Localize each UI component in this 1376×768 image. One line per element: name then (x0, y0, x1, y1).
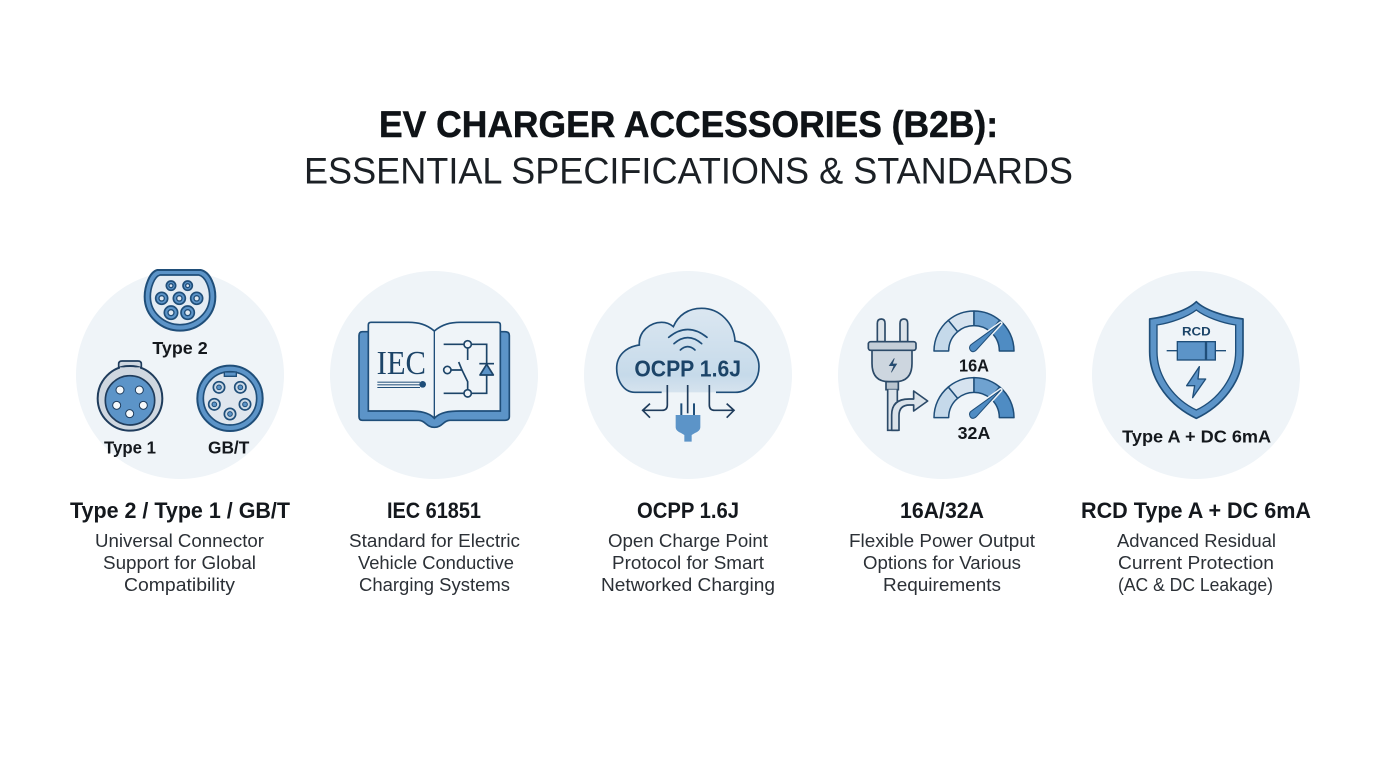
connector: Type 1 (98, 361, 162, 431)
wifi signal (669, 329, 707, 350)
label: Type A + DC 6mA: Type A + DC 6mA (1122, 427, 1271, 447)
connector: GB/T (197, 366, 263, 431)
shield label: RCD: RCD (1182, 325, 1211, 339)
heading: OCPP 1.6J: OCPP 1.6J (637, 498, 739, 523)
icon: connector types (76, 270, 284, 479)
description: 16A/32A: Flexible Power Output (849, 531, 1035, 551)
cloud (617, 308, 759, 392)
icon: plug and gauges (838, 271, 1046, 479)
cloud label: OCPP 1.6J (634, 356, 741, 382)
label: Type 1: Type 1 (104, 437, 156, 457)
label: 16A: 16A (959, 356, 989, 376)
description: 16A/32A (849, 531, 1035, 595)
gauge: 32A (934, 378, 1014, 418)
description: IEC 61851: Charging Systems (359, 575, 510, 595)
description: connector types (95, 531, 264, 595)
label: GB/T: GB/T (208, 437, 249, 457)
component symbol (1167, 342, 1226, 360)
network arrows (643, 385, 734, 418)
branch arrow (892, 391, 928, 430)
description: OCPP 1.6J: Networked Charging (601, 575, 775, 595)
heading: IEC 61851: IEC 61851 (387, 498, 481, 523)
column: connector types (70, 270, 291, 595)
description: OCPP 1.6J: Open Charge Point (608, 531, 768, 551)
plug (868, 319, 916, 430)
description: RCD (1117, 531, 1276, 595)
book text lines (377, 381, 426, 388)
description: RCD: (AC & DC Leakage) (1118, 575, 1273, 595)
gauge: 16A (934, 311, 1014, 352)
connector: Type 2 (145, 270, 215, 331)
icon: open standards book (330, 271, 538, 479)
title: EV CHARGER ACCESSORIES (B2B): (379, 104, 998, 145)
circuit diagram (444, 341, 494, 397)
column: 16A/32A (838, 271, 1046, 595)
book pages (368, 322, 500, 418)
description: RCD: Advanced Residual (1117, 531, 1276, 551)
heading: 16A/32A: 16A/32A (900, 498, 984, 523)
description: OCPP 1.6J: Protocol for Smart (612, 553, 764, 573)
description: 16A/32A: Requirements (883, 575, 1001, 595)
heading: connector types: Type 2 / Type 1 / GB/T (70, 498, 291, 523)
label: Type 2: Type 2 (152, 338, 208, 358)
description: connector types: Support for Global (103, 553, 256, 573)
icon: RCD shield (1092, 271, 1300, 479)
column: OCPP 1.6J (584, 271, 792, 595)
title (304, 104, 1073, 192)
shield (1150, 302, 1243, 418)
column: IEC 61851 (330, 271, 538, 595)
description: connector types: Compatibility (124, 575, 235, 595)
description: IEC 61851: Vehicle Conductive (358, 553, 514, 573)
book cover (359, 332, 509, 427)
icon: networked cloud (584, 271, 792, 479)
column: RCD protection (1081, 271, 1311, 595)
description: connector types: Universal Connector (95, 531, 264, 551)
label: 32A: 32A (958, 423, 990, 443)
plug (676, 403, 700, 442)
book text: IEC: IEC (377, 345, 426, 382)
lightning bolt (1187, 367, 1206, 398)
description: 16A/32A: Options for Various (863, 553, 1021, 573)
description: OCPP 1.6J (601, 531, 775, 595)
title: ESSENTIAL SPECIFICATIONS & STANDARDS (304, 150, 1073, 192)
description: RCD: Current Protection (1118, 553, 1274, 573)
heading: RCD: RCD Type A + DC 6mA (1081, 498, 1311, 523)
description: IEC 61851: Standard for Electric (349, 531, 520, 551)
description: IEC 61851 (349, 531, 520, 595)
